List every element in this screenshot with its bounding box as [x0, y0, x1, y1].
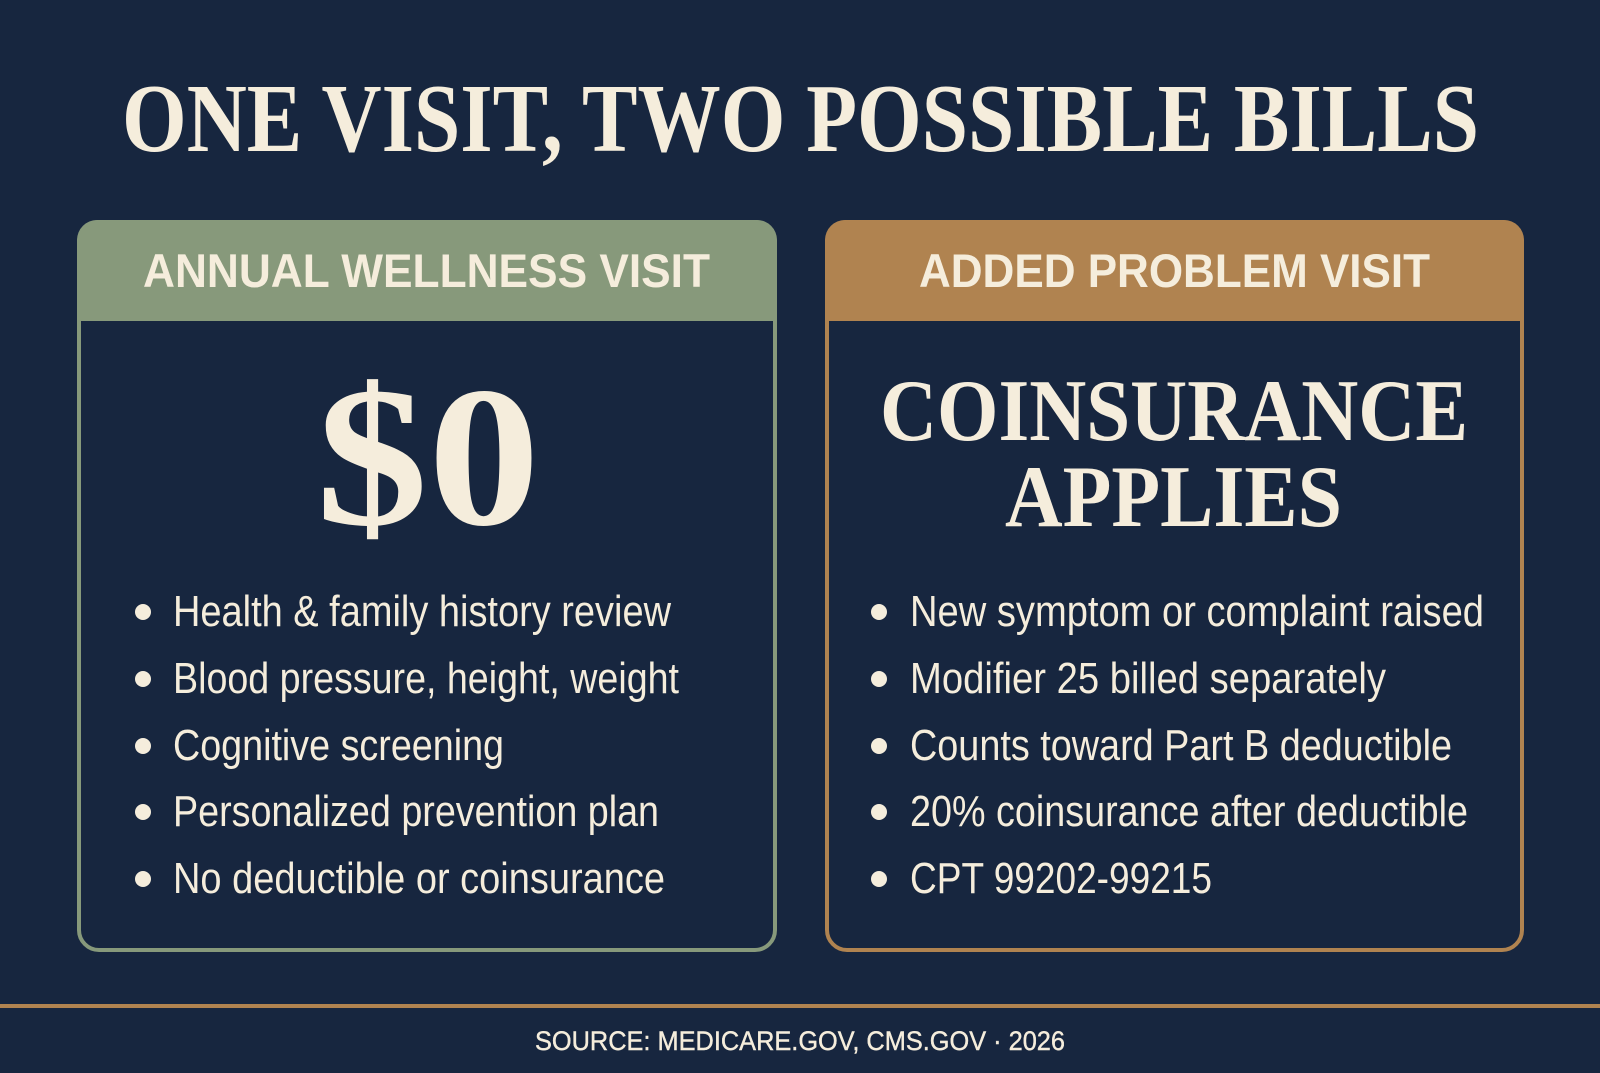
list: problem visit items: [871, 587, 1484, 903]
list: wellness visit items: Cognitive screening: [173, 721, 504, 770]
list: wellness visit items: No deductible or coinsurance: [173, 854, 665, 903]
panel: annual wellness visit: [77, 220, 777, 950]
list: problem visit items: Modifier 25 billed separately: [910, 654, 1386, 703]
list: wellness visit items: Health & family history review: [173, 587, 671, 636]
big statement: coinsurance applies: COINSURANCE: [880, 363, 1468, 460]
list: wellness visit items: Blood pressure, height, weight: [173, 654, 679, 703]
list: problem visit items: 20% coinsurance after deductible: [910, 787, 1468, 836]
list: wellness visit items: Personalized prevention plan: [173, 787, 659, 836]
heading: annual wellness visit: ANNUAL WELLNESS VISIT: [143, 244, 710, 297]
panel border: tan: [827, 222, 1522, 950]
panel: added problem visit: [825, 220, 1524, 950]
panel header: tan: [825, 220, 1524, 321]
big statement: coinsurance applies: [880, 363, 1468, 546]
heading: added problem visit: ADDED PROBLEM VISIT: [919, 244, 1430, 297]
panel header: green: [77, 220, 777, 321]
list: problem visit items: Counts toward Part B deductible: [910, 721, 1452, 770]
list: problem visit items: CPT 99202-99215: [910, 854, 1212, 903]
panel border: green: [79, 222, 775, 950]
list: problem visit items: New symptom or complaint raised: [910, 587, 1484, 636]
big price: $0: $0: [316, 347, 540, 568]
source footer: SOURCE: MEDICARE.GOV, CMS.GOV · 2026: [535, 1026, 1065, 1056]
big statement: coinsurance applies: APPLIES: [1005, 449, 1342, 546]
list: wellness visit items: [135, 587, 679, 903]
